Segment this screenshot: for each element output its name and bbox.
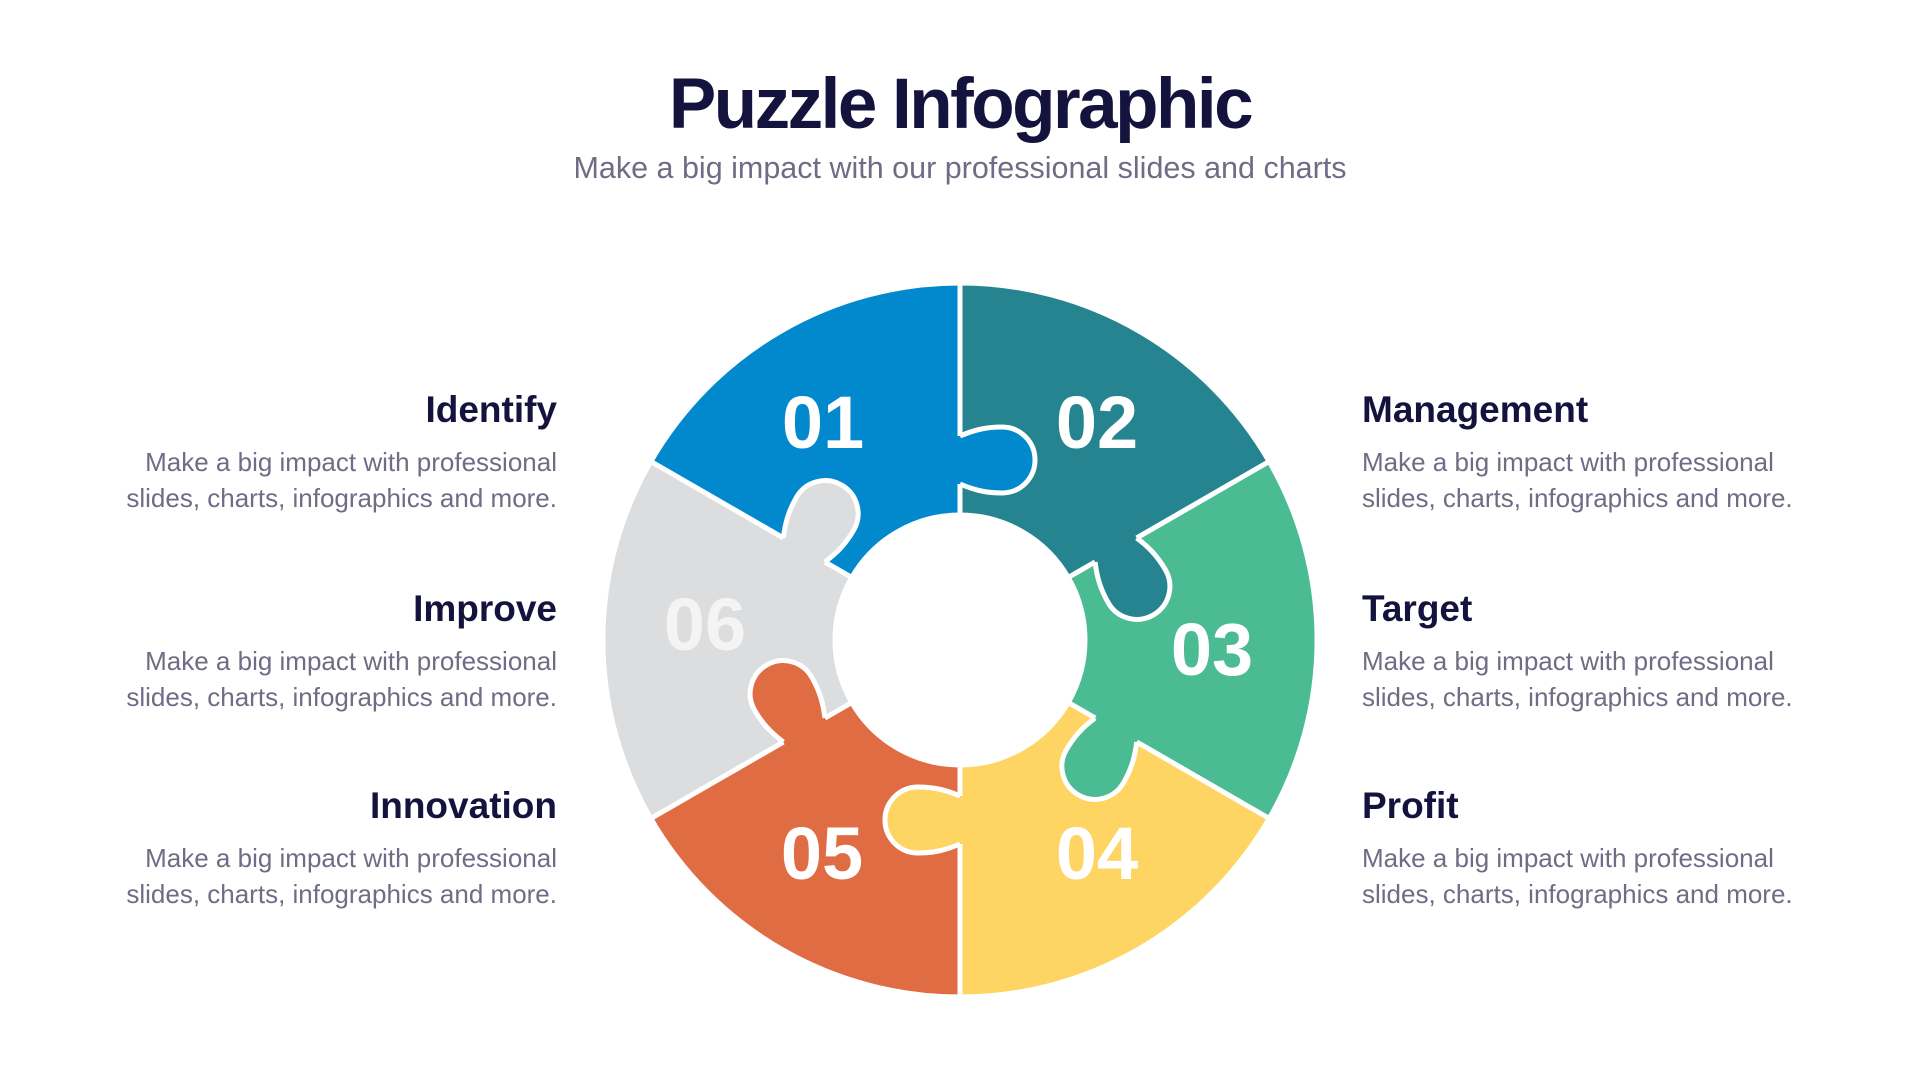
numbers: 03 (1171, 608, 1253, 691)
tab: 02 into 03 (1085, 530, 1182, 631)
text block: Target (1362, 588, 1793, 712)
piece 06 (603, 462, 852, 818)
text block: Profit: Make a big impact with professional (1362, 843, 1774, 873)
text block: Profit: Profit (1362, 785, 1459, 826)
text block: Management: Management (1362, 389, 1588, 430)
piece 03 (1068, 462, 1317, 818)
text block: Management: Make a big impact with professional (1362, 447, 1774, 477)
title: Puzzle Infographic (669, 65, 1251, 144)
text block: Identify: Identify (425, 389, 557, 430)
piece 04 (960, 702, 1269, 997)
tab: 01 into 02 (956, 427, 1035, 493)
text block: Innovation: Innovation (370, 785, 557, 826)
piece 02 (960, 283, 1269, 578)
text block: Improve (126, 588, 557, 712)
text block: Target: slides, charts, infographics and more. (1362, 682, 1793, 712)
piece 01 (651, 283, 960, 578)
tab: 03 into 04 (1050, 710, 1146, 811)
text block: Profit (1362, 785, 1793, 909)
numbers: 05 (781, 812, 863, 895)
numbers: 06 (664, 583, 746, 666)
text block: Innovation (126, 785, 557, 909)
text block: Innovation: slides, charts, infographics and more. (126, 879, 557, 909)
numbers: 04 (1056, 812, 1138, 895)
numbers (664, 381, 1253, 895)
numbers: 02 (1056, 381, 1138, 464)
tab: 04 into 05 (885, 787, 964, 853)
text block: Improve: Improve (413, 588, 557, 629)
text block: Identify (126, 389, 557, 513)
subtitle: Make a big impact with our professional slides and charts (573, 151, 1347, 185)
text block: Identify: slides, charts, infographics and more. (126, 483, 557, 513)
text block: Improve: Make a big impact with professional (145, 646, 557, 676)
tab: 06 into 01 (774, 469, 870, 570)
tab: 05 into 06 (738, 649, 835, 750)
text block: Target: Target (1362, 588, 1472, 629)
text block: Improve: slides, charts, infographics and more. (126, 682, 557, 712)
text block: Innovation: Make a big impact with professional (145, 843, 557, 873)
numbers: 01 (782, 381, 864, 464)
text block: Management: slides, charts, infographics and more. (1362, 483, 1793, 513)
text block: Management (1362, 389, 1793, 513)
text block: Identify: Make a big impact with professional (145, 447, 557, 477)
text block: Target: Make a big impact with professional (1362, 646, 1774, 676)
piece 05 (651, 702, 960, 997)
text block: Profit: slides, charts, infographics and more. (1362, 879, 1793, 909)
